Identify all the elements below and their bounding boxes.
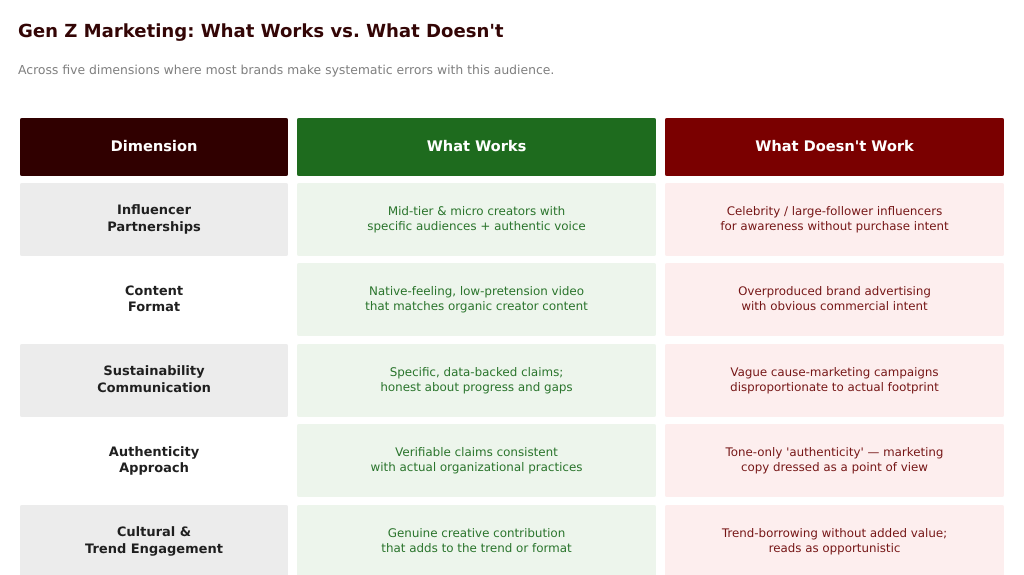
works: influencer partnerships [297,182,656,256]
works: authenticity approach [297,424,656,497]
works: sustainability communication: honest about progress and gaps [380,380,573,394]
works: sustainability communication [297,344,656,416]
doesn't work: influencer partnerships [665,182,1004,256]
doesn't work: sustainability communication [665,344,1004,416]
doesn't work: authenticity approach: Tone-only 'authenticity' — marketing [726,445,943,459]
header: What Works: What Works [427,138,526,155]
works: authenticity approach: with actual organizational practices [370,460,582,474]
dimension: Authenticity Approach: Authenticity [109,445,199,460]
dimension: Content Format [125,284,183,315]
works: cultural and trend engagement: Genuine creative contribution [388,526,565,540]
doesn't work: cultural and trend engagement: Trend-borrowing without added value; [722,526,947,540]
dimension: Authenticity Approach [108,445,199,476]
dimension: Sustainability Communication [20,344,288,416]
header: What Doesn't Work: What Doesn't Work [755,138,914,155]
works: content format: Native-feeling, low-pretension video [369,284,584,298]
title: Gen Z Marketing: What Works vs. What Doesn't [18,21,504,42]
dimension: Cultural & Trend Engagement: Trend Engagement [85,542,223,557]
dimension: Cultural & Trend Engagement [20,504,288,575]
doesn't work: cultural and trend engagement [665,504,1004,575]
works: sustainability communication: Specific, data-backed claims; [390,364,563,378]
doesn't work: authenticity approach [665,424,1004,497]
works: content format [297,263,656,336]
doesn't work: content format [665,263,1004,336]
dimension: Content Format: Content [125,284,183,299]
doesn't work: content format: Overproduced brand advertising [738,284,931,298]
subtitle: Across five dimensions where most brands make systematic errors with this audience. [18,62,554,77]
doesn't work: influencer partnerships: Celebrity / large-follower influencers [727,204,942,218]
header: Dimension [20,118,288,176]
doesn't work: content format: with obvious commercial intent [741,299,928,313]
header: What Doesn't Work [665,118,1004,176]
dimension: Sustainability Communication: Sustainability [103,364,205,379]
dimension: Sustainability Communication: Communication [97,381,211,396]
dimension: Content Format: Format [128,300,180,315]
works: cultural and trend engagement: that adds to the trend or format [381,541,572,555]
dimension: Authenticity Approach: Approach [119,461,189,476]
works: content format: that matches organic creator content [365,299,588,313]
works: cultural and trend engagement [297,504,656,575]
doesn't work: authenticity approach: copy dressed as a point of view [741,460,928,474]
dimension: Influencer Partnerships [20,182,288,256]
dimension: Influencer Partnerships: Influencer [117,203,191,218]
header: Dimension: Dimension [111,138,197,155]
works: influencer partnerships: specific audiences + authentic voice [367,219,586,233]
doesn't work: sustainability communication: Vague cause-marketing campaigns [730,364,939,378]
dimension: Cultural & Trend Engagement: Cultural & [117,525,191,540]
doesn't work: cultural and trend engagement: reads as opportunistic [769,541,900,555]
doesn't work: sustainability communication: disproportionate to actual footprint [730,380,939,394]
doesn't work: influencer partnerships: for awareness without purchase intent [720,219,949,233]
header: What Works [297,118,656,176]
dimension: Influencer Partnerships: Partnerships [107,220,201,235]
works: authenticity approach: Verifiable claims consistent [395,445,558,459]
works: influencer partnerships: Mid-tier & micro creators with [388,204,565,218]
